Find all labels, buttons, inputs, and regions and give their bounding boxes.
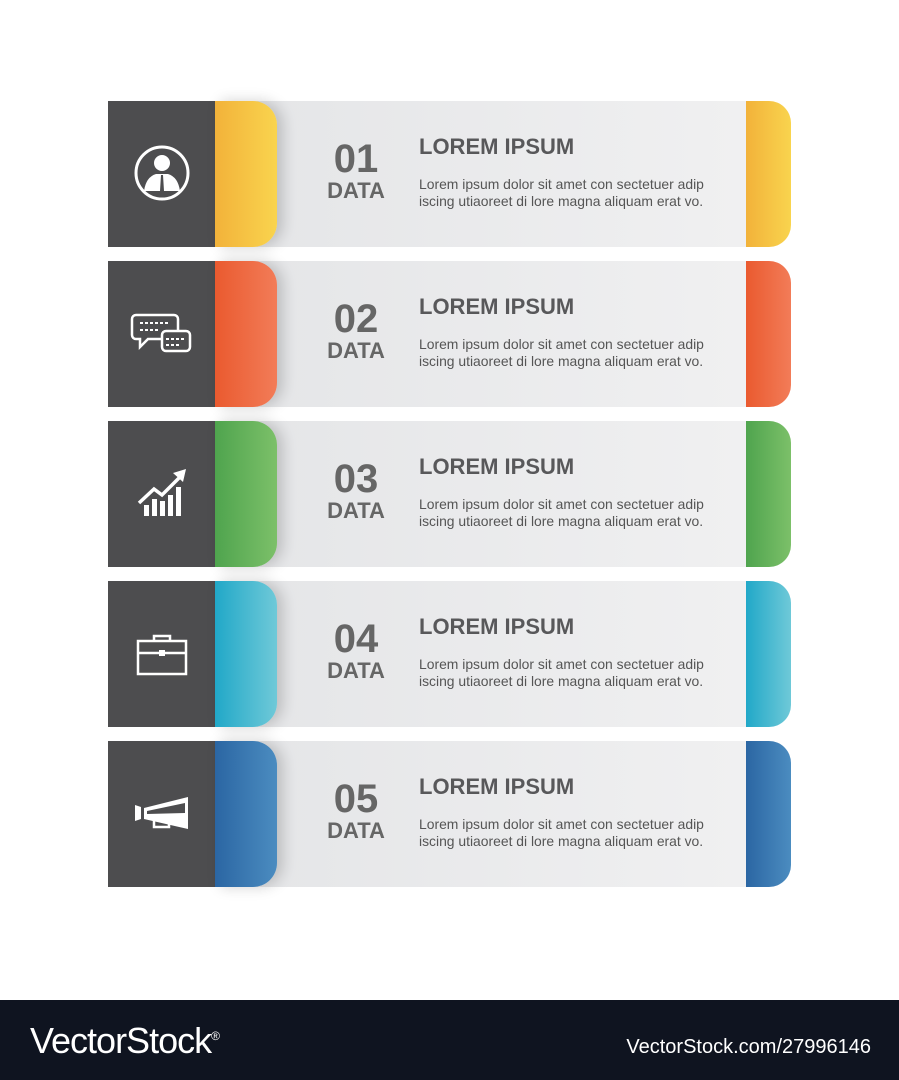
row 2 [108,255,791,413]
row 4: DATA [327,658,385,683]
row 4: LOREM IPSUM [419,614,574,639]
row 5: iscing utiaoreet di lore magna aliquam erat vo. [419,833,703,849]
row 2: Lorem ipsum dolor sit amet con sectetuer adip [419,336,704,352]
row 2: LOREM IPSUM [419,294,574,319]
icon: megaphone [135,797,188,829]
row 4: Lorem ipsum dolor sit amet con sectetuer adip [419,656,704,672]
row 1: LOREM IPSUM [419,134,574,159]
icon: growth chart [138,469,186,516]
row 5: DATA [327,818,385,843]
icon: businessman [134,146,190,200]
row 5: LOREM IPSUM [419,774,574,799]
icon: chat [130,314,192,352]
row 3: DATA [327,498,385,523]
footer bar [0,1000,899,1080]
row 3: LOREM IPSUM [419,454,574,479]
row 1: Lorem ipsum dolor sit amet con sectetuer adip [419,176,704,192]
row 3: iscing utiaoreet di lore magna aliquam erat vo. [419,513,703,529]
row 5: Lorem ipsum dolor sit amet con sectetuer adip [419,816,704,832]
row 2: iscing utiaoreet di lore magna aliquam erat vo. [419,353,703,369]
row 3 [108,415,791,573]
footer bar: VectorStock.com/27996146 [626,1036,871,1058]
row 1 [108,95,791,253]
row 1: iscing utiaoreet di lore magna aliquam erat vo. [419,193,703,209]
row 3: Lorem ipsum dolor sit amet con sectetuer adip [419,496,704,512]
row 4 [108,575,791,733]
row 2: DATA [327,338,385,363]
row 3: 03 [334,457,378,501]
row 4: iscing utiaoreet di lore magna aliquam erat vo. [419,673,703,689]
footer bar: VectorStock® [30,1020,219,1061]
row 1: 01 [334,137,378,181]
row 2: 02 [334,297,378,341]
row 4: 04 [334,617,378,661]
row 1: DATA [327,178,385,203]
row 5 [108,735,791,893]
row 5: 05 [334,777,378,821]
icon: briefcase [136,634,188,676]
